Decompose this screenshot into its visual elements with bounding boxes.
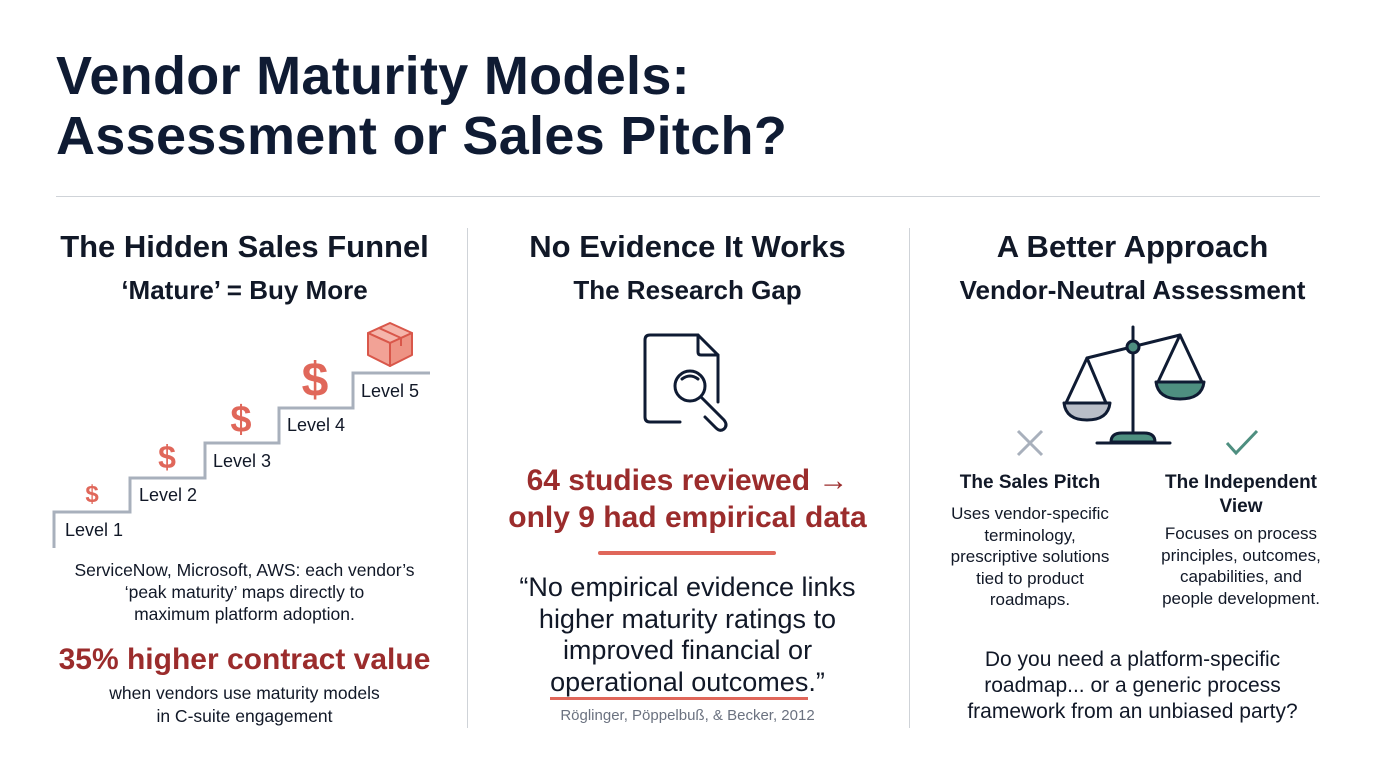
heading: No Evidence It Works [529, 229, 846, 264]
staircase chart: $ [302, 354, 329, 407]
text block: ServiceNow, Microsoft, AWS: each vendor’s [74, 560, 415, 580]
panel: hidden sales funnel: in C-suite engagement [156, 706, 333, 726]
stat callout: 64 studies reviewed → [527, 464, 848, 497]
quote: “No empirical evidence links higher maturity ratings to improved financial or operational outcomes.” [519, 572, 856, 696]
panel: better approach [951, 229, 1321, 723]
heading: A Better Approach [997, 229, 1268, 264]
panel: no evidence [508, 229, 867, 724]
column: independent view [1161, 472, 1321, 608]
panel: hidden sales funnel: when vendors use maturity models [109, 683, 380, 703]
text block: maximum platform adoption. [134, 604, 355, 624]
staircase chart: Level 5 [361, 381, 419, 401]
icon: document magnifier [644, 334, 728, 432]
stat callout [508, 464, 867, 534]
column: independent view: Focuses on process principles, outcomes, capabilities, and people development. [1161, 524, 1321, 608]
staircase chart: Level 2 [139, 485, 197, 505]
staircase chart: Level 3 [213, 451, 271, 471]
icon: check [1227, 431, 1257, 453]
subheading: ‘Mature’ = Buy More [121, 275, 368, 305]
staircase chart: Level 4 [287, 415, 345, 435]
icon: scales [1017, 326, 1258, 456]
icon: box [368, 323, 412, 366]
column: sales pitch: Uses vendor-specific terminology, prescriptive solutions tied to product roadmaps. [951, 504, 1109, 609]
text block: ‘peak maturity’ maps directly to [125, 582, 364, 602]
staircase chart: Level 1 [65, 520, 123, 540]
question text: Do you need a platform-specific roadmap... or a generic process framework from an unbiased party? [967, 648, 1298, 723]
staircase chart: $ [85, 481, 99, 508]
title: Assessment or Sales Pitch? [56, 106, 787, 166]
staircase chart: $ [230, 399, 252, 441]
stat callout: only 9 had empirical data [508, 501, 867, 534]
title: Vendor Maturity Models: [56, 46, 690, 106]
citation: Röglinger, Pöppelbuß, & Becker, 2012 [560, 707, 815, 724]
title [56, 46, 787, 166]
text block [74, 560, 415, 624]
subheading: The Research Gap [573, 275, 802, 305]
column: independent view: The Independent View [1165, 472, 1317, 517]
subheading: Vendor-Neutral Assessment [960, 275, 1305, 305]
panel: hidden sales funnel [52, 229, 430, 726]
staircase chart: $ [158, 439, 176, 475]
icon: cross [1018, 431, 1042, 455]
staircase chart [52, 322, 430, 548]
stat callout: 35% higher contract value [59, 643, 430, 676]
heading: The Hidden Sales Funnel [60, 229, 429, 264]
column: sales pitch: The Sales Pitch [960, 472, 1100, 493]
